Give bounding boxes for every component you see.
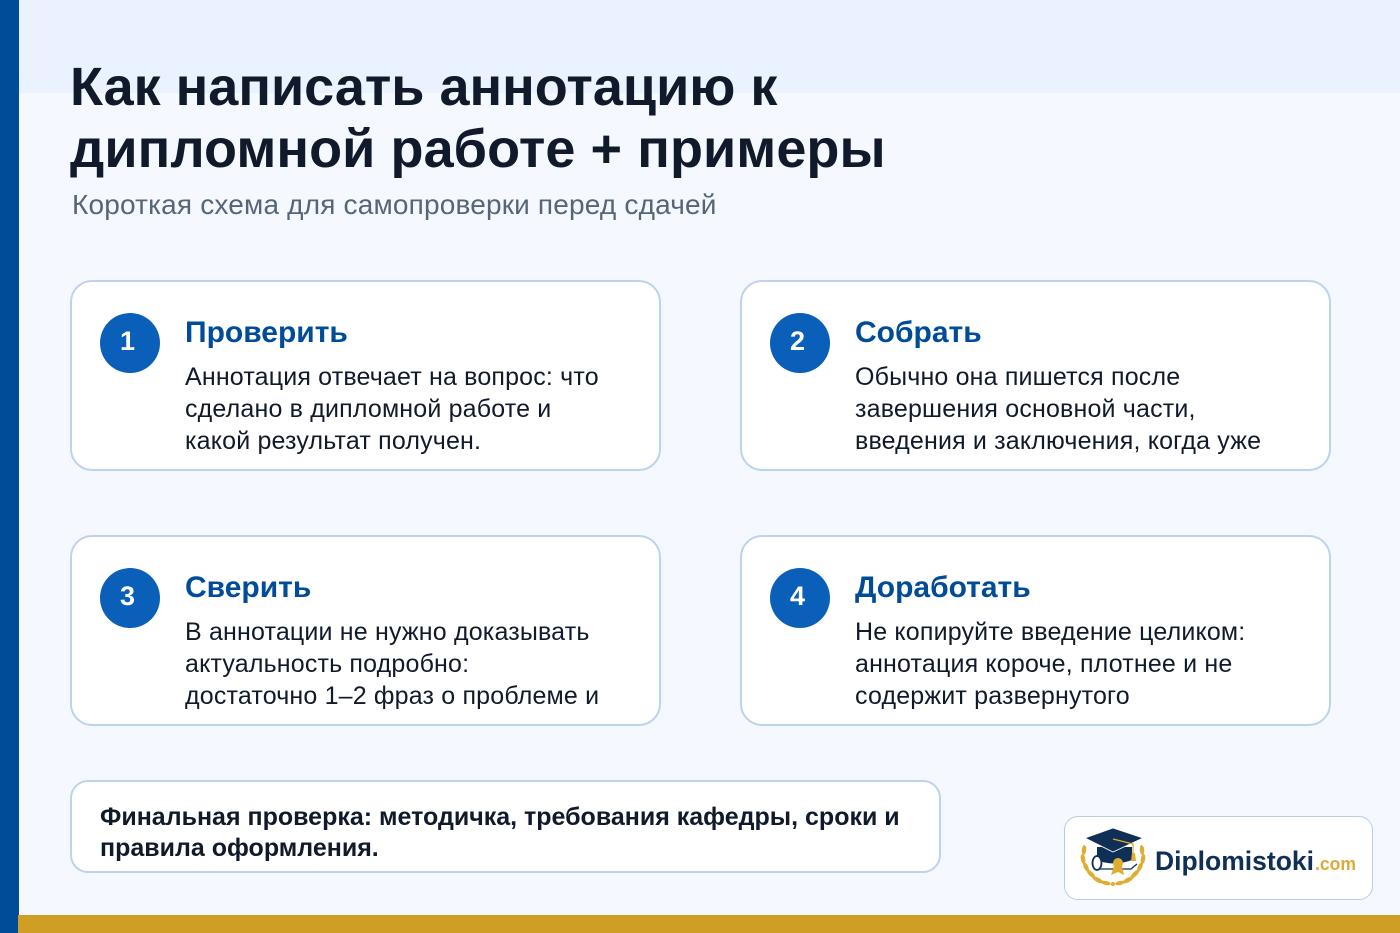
step number 2 [770,313,830,373]
text: step 2: Обычно она пишется после [855,363,1180,391]
icon: graduation cap and laurel [1080,828,1146,886]
text: step 1 [185,363,599,455]
text: step 3: достаточно 1–2 фраз о проблеме и [185,682,599,710]
heading: Проверить: Проверить [185,316,348,349]
text: step 4: аннотация короче, плотнее и не [855,650,1232,678]
title [70,57,886,179]
text: step 1: какой результат получен. [185,427,481,455]
step number 1 [100,313,160,373]
panel: step 2 [740,280,1331,471]
step number 3 [100,568,160,628]
text: step 4: Не копируйте введение целиком: [855,618,1245,646]
text: step 4: содержит развернутого [855,682,1130,710]
callout: final check [70,780,941,873]
text: step 1: Аннотация отвечает на вопрос: что [185,363,599,391]
subtitle: Короткая схема для самопроверки перед сдачей [72,189,717,220]
heading: Доработать: Доработать [855,571,1031,604]
text: step 2: завершения основной части, [855,395,1196,423]
heading: Сверить: Сверить [185,571,311,604]
text: step 3: актуальность подробно: [185,650,469,678]
heading: Собрать: Собрать [855,316,982,349]
step number 3: 3 [120,581,135,611]
text: step 3 [185,618,599,710]
title: дипломной работе + примеры [70,119,886,179]
text: step 2: введения и заключения, когда уже [855,427,1261,455]
step number 4: 4 [790,581,805,611]
title: Как написать аннотацию к [70,57,777,117]
callout text: Финальная проверка: методичка, требования кафедры, сроки и [100,803,900,831]
callout text: правила оформления. [100,834,379,862]
header band [18,0,1400,93]
left accent bar [0,0,19,933]
logo: Diplomistoki.com [1064,816,1373,900]
panel: step 4 [740,535,1331,726]
text: step 3: В аннотации не нужно доказывать [185,618,590,646]
text: step 1: сделано в дипломной работе и [185,395,551,423]
step number 1: 1 [120,326,135,356]
callout text [100,803,900,862]
bottom gold bar [18,915,1400,933]
text: step 4 [855,618,1245,710]
panel: step 1 [70,280,661,471]
text: step 2 [855,363,1261,455]
logo wordmark: Diplomistoki [1155,846,1314,876]
logo domain: .com [1315,854,1356,874]
step number 2: 2 [790,326,805,356]
step number 4 [770,568,830,628]
panel: step 3 [70,535,661,726]
